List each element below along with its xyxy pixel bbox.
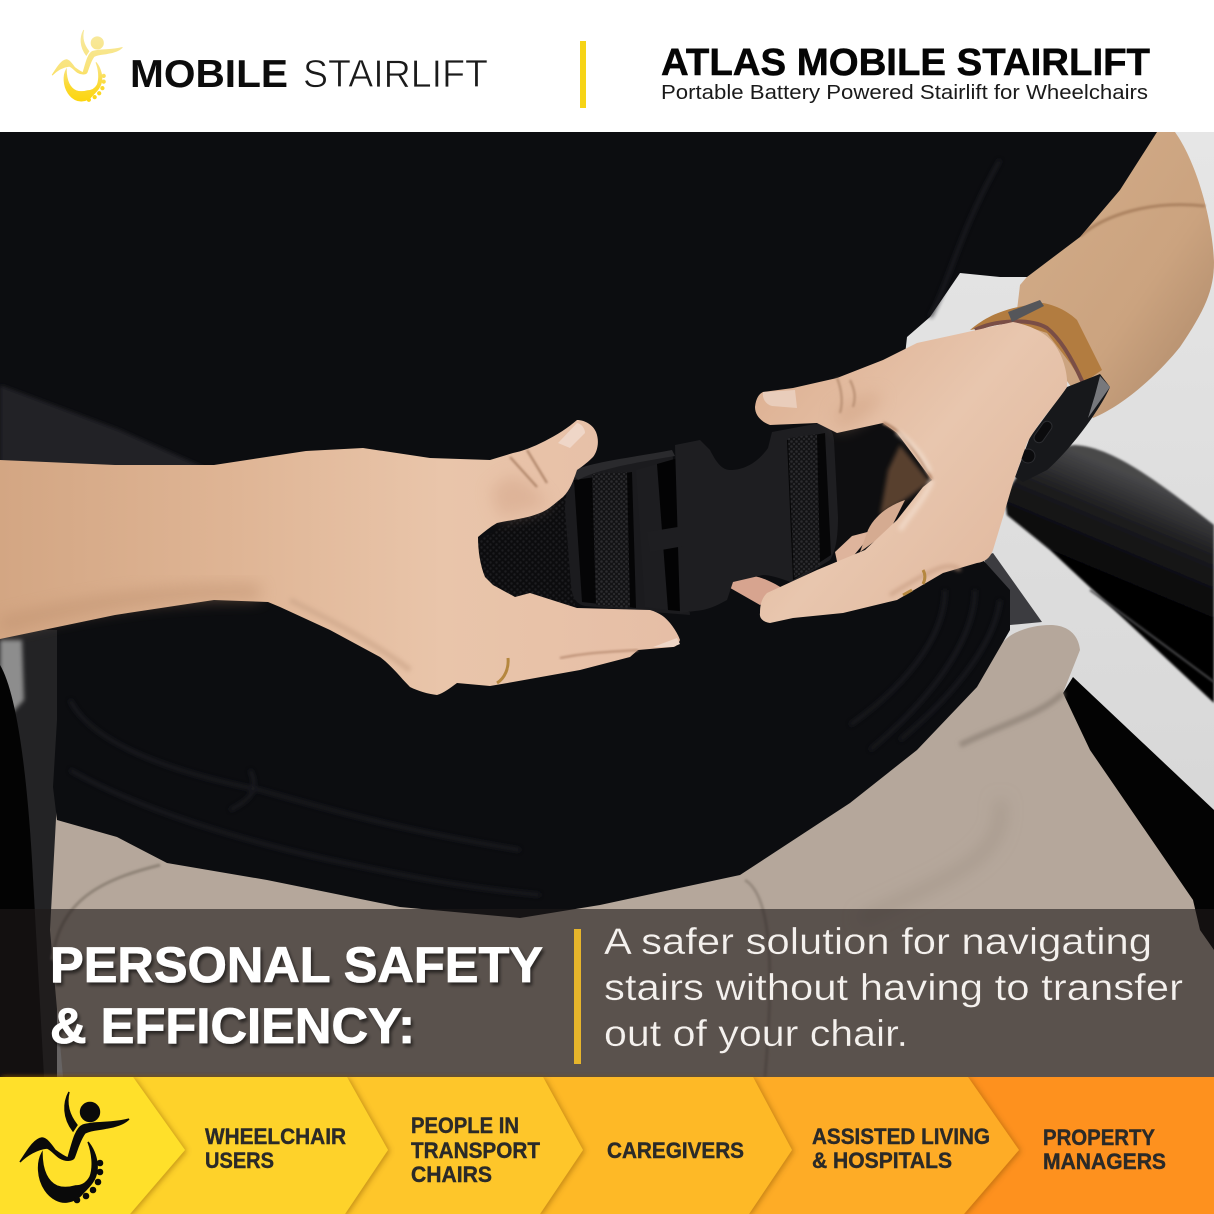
chevron: people in transport chairs: CHAIRS [411,1162,492,1187]
header divider [580,41,586,108]
chevron: property managers: MANAGERS [1043,1149,1166,1174]
caption heading: & EFFICIENCY: [50,998,415,1054]
wheelchair left frame [0,600,57,1077]
wheelchair armrest [984,444,1214,950]
chevron: caregivers: CAREGIVERS [607,1138,744,1163]
audience chevron strip [0,1077,1214,1214]
hand shading [490,475,548,518]
product subtitle: Portable Battery Powered Stairlift for Wheelchairs [661,82,1148,104]
upper arm [1017,132,1214,418]
photo: person in wheelchair fastening a safety belt buckle [0,132,1214,1077]
caption divider [574,929,581,1064]
chevron: people in transport chairs: TRANSPORT [411,1138,541,1163]
chevron: property managers [1043,1125,1166,1174]
fingers behind buckle [725,500,905,605]
chevron: wheelchair users: USERS [205,1148,274,1173]
wristwatch [970,300,1110,482]
chevron: people in transport chairs: PEOPLE IN [411,1113,519,1138]
belt strap [478,444,930,606]
dark caption band [0,909,1214,1077]
shirt folds [70,160,1000,895]
chevron: assisted living & hospitals [0,1077,1019,1214]
plastic side-release buckle [565,423,838,615]
header bar [0,0,1214,132]
gold ring [497,658,508,683]
logo wordmark: MOBILE [130,53,288,96]
chevron: caregivers [0,1077,792,1214]
chevron: assisted living & hospitals: ASSISTED LIVING [812,1124,990,1149]
black t-shirt [0,132,1157,918]
product title: ATLAS MOBILE STAIRLIFT [661,42,1150,84]
chevron: wheelchair users: WHEELCHAIR [205,1124,346,1149]
logo wordmark [130,53,488,96]
left hand and forearm [0,420,680,695]
chevron: logo tile [0,1077,185,1214]
icon: black wheelchair logo [20,1092,129,1203]
logo wordmark: STAIRLIFT [303,53,488,96]
gold rings [903,570,925,595]
right hand [755,322,1067,623]
caption heading: PERSONAL SAFETY [50,937,543,993]
chevron: assisted living & hospitals: & HOSPITALS [812,1148,952,1173]
caption body text: A safer solution for navigating [604,921,1152,962]
caption body text: stairs without having to transfer [604,967,1183,1008]
caption heading [50,937,543,1054]
caption body text: out of your chair. [604,1013,908,1054]
trousers [50,625,1214,1077]
caption body text [604,921,1183,1054]
chevron: property managers: PROPERTY [1043,1125,1155,1150]
icon: yellow wheelchair logo [52,30,122,101]
chevron: people in transport chairs [0,1077,583,1214]
chevron: wheelchair users [0,1077,388,1214]
